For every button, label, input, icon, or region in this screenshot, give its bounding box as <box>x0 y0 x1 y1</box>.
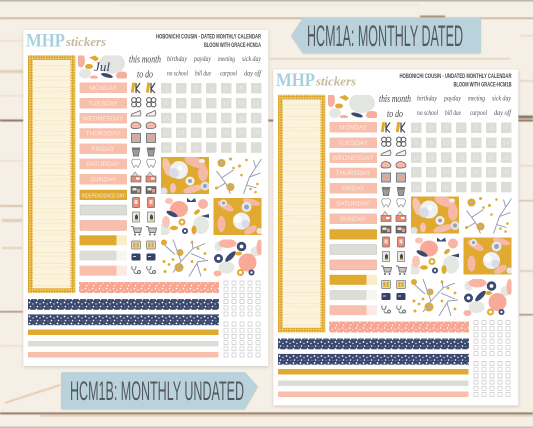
date numbers: 24 <box>193 131 200 137</box>
date numbers: 8 <box>415 141 419 147</box>
weekday stickers: TUESDAY <box>338 140 369 147</box>
date numbers: 18 <box>458 156 465 162</box>
label tag: HCM1B monthly undated: HCM1B: MONTHLY UNDATED <box>70 376 244 406</box>
script labels: this month <box>129 54 161 66</box>
date numbers: 8 <box>165 102 169 108</box>
date numbers: 21 <box>503 156 510 162</box>
date numbers: 21 <box>253 116 260 122</box>
sheet title <box>400 73 512 88</box>
date numbers: 11 <box>208 102 215 108</box>
script labels: meeting <box>468 94 485 102</box>
date numbers: 12 <box>223 102 230 108</box>
date numbers: 3 <box>445 126 449 132</box>
date numbers: 7 <box>505 126 509 132</box>
date numbers: 22 <box>163 131 170 137</box>
date numbers: 4 <box>210 86 214 92</box>
sheet logo: stickers <box>65 34 106 49</box>
script labels: this month <box>379 94 411 105</box>
sheet logo <box>26 32 106 52</box>
script labels: sick day <box>492 94 512 102</box>
date numbers: 6 <box>240 86 244 92</box>
weekday stickers: SUNDAY <box>340 216 367 223</box>
script labels: to do <box>137 70 153 80</box>
sheet logo: MHP <box>276 71 315 91</box>
date numbers: 1 <box>415 126 419 132</box>
header floral with month <box>77 54 128 80</box>
script labels: bill due <box>445 109 461 117</box>
date numbers: 29 <box>413 185 420 191</box>
date numbers: 26 <box>473 170 480 176</box>
script labels: payday <box>193 55 212 63</box>
script labels: birthday <box>167 55 188 63</box>
weekday stickers: TUESDAY <box>88 100 119 108</box>
date numbers: 14 <box>253 102 260 108</box>
date numbers: 14 <box>503 141 510 147</box>
sheet logo: stickers <box>315 74 356 88</box>
weekday stickers: FRIDAY <box>342 186 365 192</box>
date numbers: 31 <box>443 185 450 191</box>
date numbers: 27 <box>488 170 495 176</box>
label tag: HCM1B monthly undated <box>61 372 258 410</box>
date numbers: 25 <box>208 131 215 137</box>
weekday stickers: SATURDAY <box>86 161 121 168</box>
date numbers: 30 <box>428 185 435 191</box>
sheet title: HOBONICHI COUSIN - DATED MONTHLY CALENDAR <box>156 33 261 40</box>
date numbers: 20 <box>238 116 245 122</box>
sheet title <box>156 33 261 49</box>
date numbers: 12 <box>473 141 480 147</box>
header floral <box>327 93 378 119</box>
script labels: no school <box>167 70 188 78</box>
weekday stickers: SUNDAY <box>90 176 117 184</box>
date numbers: 5 <box>475 126 479 132</box>
date numbers: 20 <box>488 156 495 162</box>
script labels: birthday <box>417 94 438 102</box>
date numbers: 13 <box>488 141 495 147</box>
weekday stickers: WEDNESDAY <box>83 116 124 122</box>
date numbers: 10 <box>193 102 200 108</box>
date numbers: 15 <box>163 116 170 122</box>
weekday stickers: THURSDAY <box>336 170 371 177</box>
date numbers: 19 <box>473 156 480 162</box>
script labels <box>129 54 262 80</box>
weekday stickers: MONDAY <box>339 124 368 132</box>
date numbers: 3 <box>195 86 199 92</box>
script labels: day off <box>244 70 262 78</box>
script labels: meeting <box>218 55 235 63</box>
date numbers: 24 <box>443 170 450 176</box>
header floral with month: Jul <box>94 59 110 74</box>
date numbers: 30 <box>178 146 185 152</box>
script labels: carpool <box>470 109 487 117</box>
weekday stickers: MONDAY <box>89 85 118 92</box>
date numbers: 29 <box>163 146 170 152</box>
date numbers: 9 <box>180 102 184 108</box>
date numbers: 17 <box>193 116 200 122</box>
weekday stickers: SATURDAY <box>336 201 371 208</box>
weekday stickers <box>82 85 125 199</box>
date numbers: 2 <box>430 126 434 132</box>
date numbers: 10 <box>443 141 450 147</box>
date numbers: 25 <box>458 170 465 176</box>
script labels: no school <box>417 109 438 117</box>
script labels: to do <box>387 109 403 120</box>
date numbers: 16 <box>178 116 185 122</box>
weekday stickers: WEDNESDAY <box>333 155 374 162</box>
date numbers: 23 <box>428 170 435 176</box>
date numbers: 23 <box>178 131 185 137</box>
date numbers: 27 <box>238 131 245 137</box>
date numbers: 17 <box>443 156 450 162</box>
label tag: HCM1A monthly dated <box>291 18 481 54</box>
date numbers: 11 <box>458 141 465 147</box>
panel: dated monthly sheet <box>23 30 268 367</box>
date numbers: 16 <box>428 156 435 162</box>
weekday stickers: FRIDAY <box>92 146 115 153</box>
date numbers: 1 <box>165 86 169 92</box>
date numbers: 13 <box>238 102 245 108</box>
script labels: payday <box>443 94 462 102</box>
weekday stickers <box>333 124 374 223</box>
sheet title: BLOOM WITH GRACE-HCM1A <box>204 42 261 49</box>
weekday stickers: INDEPENDENCE DAY <box>82 193 125 199</box>
script labels: day off <box>494 109 512 117</box>
script labels: carpool <box>220 70 237 78</box>
date numbers: 18 <box>208 116 215 122</box>
date numbers: 15 <box>413 156 420 162</box>
date numbers: 31 <box>193 146 200 152</box>
date numbers: 9 <box>430 141 434 147</box>
date numbers: 22 <box>413 170 420 176</box>
date numbers: 4 <box>460 126 464 132</box>
sheet logo: MHP <box>26 32 65 52</box>
sheet logo <box>276 71 356 91</box>
date numbers: 5 <box>225 86 229 92</box>
script labels: bill due <box>195 70 211 78</box>
date numbers: 28 <box>253 131 260 137</box>
date numbers: 26 <box>223 131 230 137</box>
date numbers: 7 <box>255 86 259 92</box>
date numbers <box>163 86 260 152</box>
date numbers: 28 <box>503 170 510 176</box>
date numbers <box>413 126 510 191</box>
date numbers: 2 <box>180 86 184 92</box>
panel: undated monthly sheet <box>273 70 518 406</box>
script labels: sick day <box>242 55 262 63</box>
weekday stickers: THURSDAY <box>86 131 121 138</box>
date numbers: 6 <box>490 126 494 132</box>
date numbers: 19 <box>223 116 230 122</box>
script labels <box>379 94 512 120</box>
